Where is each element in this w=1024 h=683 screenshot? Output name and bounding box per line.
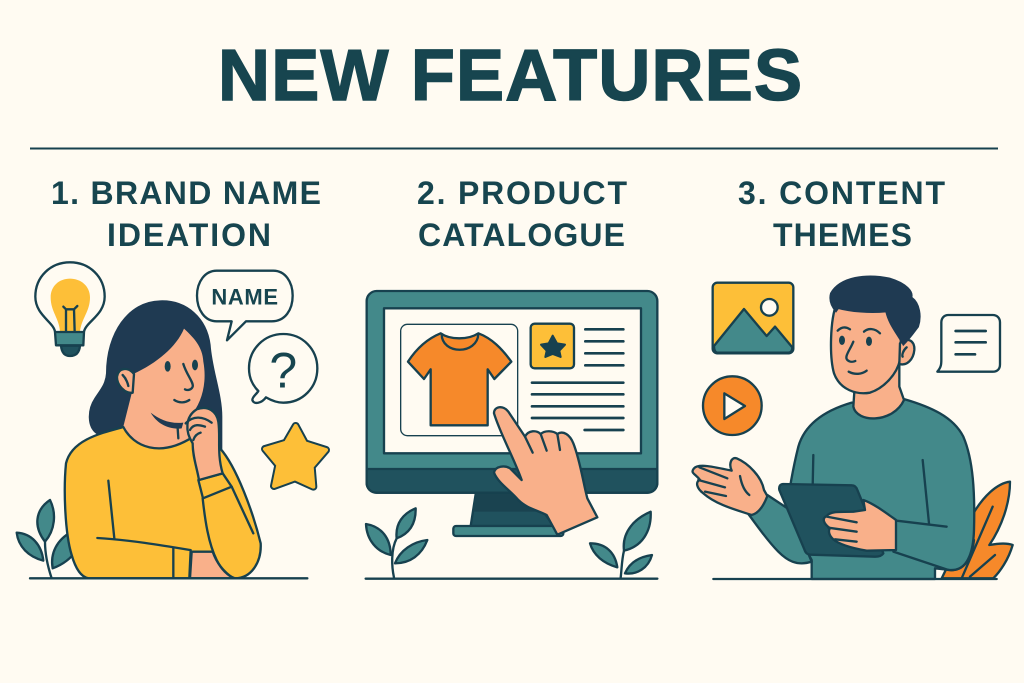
play icon bbox=[703, 376, 762, 435]
heading: product catalogue: CATALOGUE bbox=[418, 217, 625, 253]
hair bbox=[830, 276, 920, 345]
question bubble: ? bbox=[269, 343, 297, 399]
heading: product catalogue: 2. PRODUCT bbox=[417, 175, 627, 211]
image icon bbox=[713, 283, 793, 353]
icon: star bbox=[265, 426, 326, 487]
face details bbox=[838, 327, 880, 374]
plant right bbox=[590, 512, 652, 578]
icon: t-shirt bbox=[408, 333, 511, 425]
tablet bbox=[779, 484, 883, 557]
heading: product catalogue bbox=[417, 175, 627, 253]
name bubble bbox=[197, 271, 293, 340]
sweater bbox=[65, 427, 261, 578]
panel: product catalogue bbox=[366, 291, 657, 579]
torso bbox=[787, 399, 974, 579]
heading: content themes: THEMES bbox=[773, 217, 912, 253]
right forearm bbox=[893, 521, 974, 570]
heading: brand name ideation bbox=[51, 175, 321, 253]
heading: brand name ideation: 1. BRAND NAME bbox=[51, 175, 321, 211]
panel: brand name ideation bbox=[17, 262, 326, 578]
plant left bbox=[366, 508, 427, 578]
sweater lines bbox=[813, 455, 929, 523]
star badge bbox=[531, 324, 574, 368]
left arm bbox=[748, 495, 812, 563]
ear bbox=[117, 369, 134, 393]
icon: light bulb bbox=[35, 262, 105, 356]
heading: content themes bbox=[738, 175, 945, 253]
heading: brand name ideation: IDEATION bbox=[107, 217, 271, 253]
hand on chin bbox=[186, 408, 223, 480]
jaw shadow bbox=[151, 413, 183, 429]
pointing hand bbox=[494, 407, 597, 535]
heading: content themes: 3. CONTENT bbox=[738, 175, 945, 211]
leaf bbox=[942, 482, 1013, 578]
monitor stand bbox=[453, 492, 563, 536]
chat bubble bbox=[937, 315, 1000, 372]
product card bbox=[401, 324, 518, 436]
neck and face bbox=[123, 329, 205, 460]
neck and face bbox=[831, 303, 914, 418]
panel: content themes bbox=[693, 276, 1013, 579]
product text lines bbox=[532, 329, 623, 430]
title: NEW FEATURES bbox=[218, 36, 802, 116]
name bubble: NAME bbox=[211, 285, 278, 310]
open hand bbox=[693, 458, 767, 515]
face details bbox=[165, 360, 198, 402]
sleeve and arm lines bbox=[97, 473, 253, 578]
hair bbox=[89, 301, 222, 450]
monitor bbox=[367, 291, 657, 493]
question bubble bbox=[249, 334, 317, 403]
icon: plant bbox=[17, 500, 77, 578]
holding hand bbox=[824, 500, 896, 551]
